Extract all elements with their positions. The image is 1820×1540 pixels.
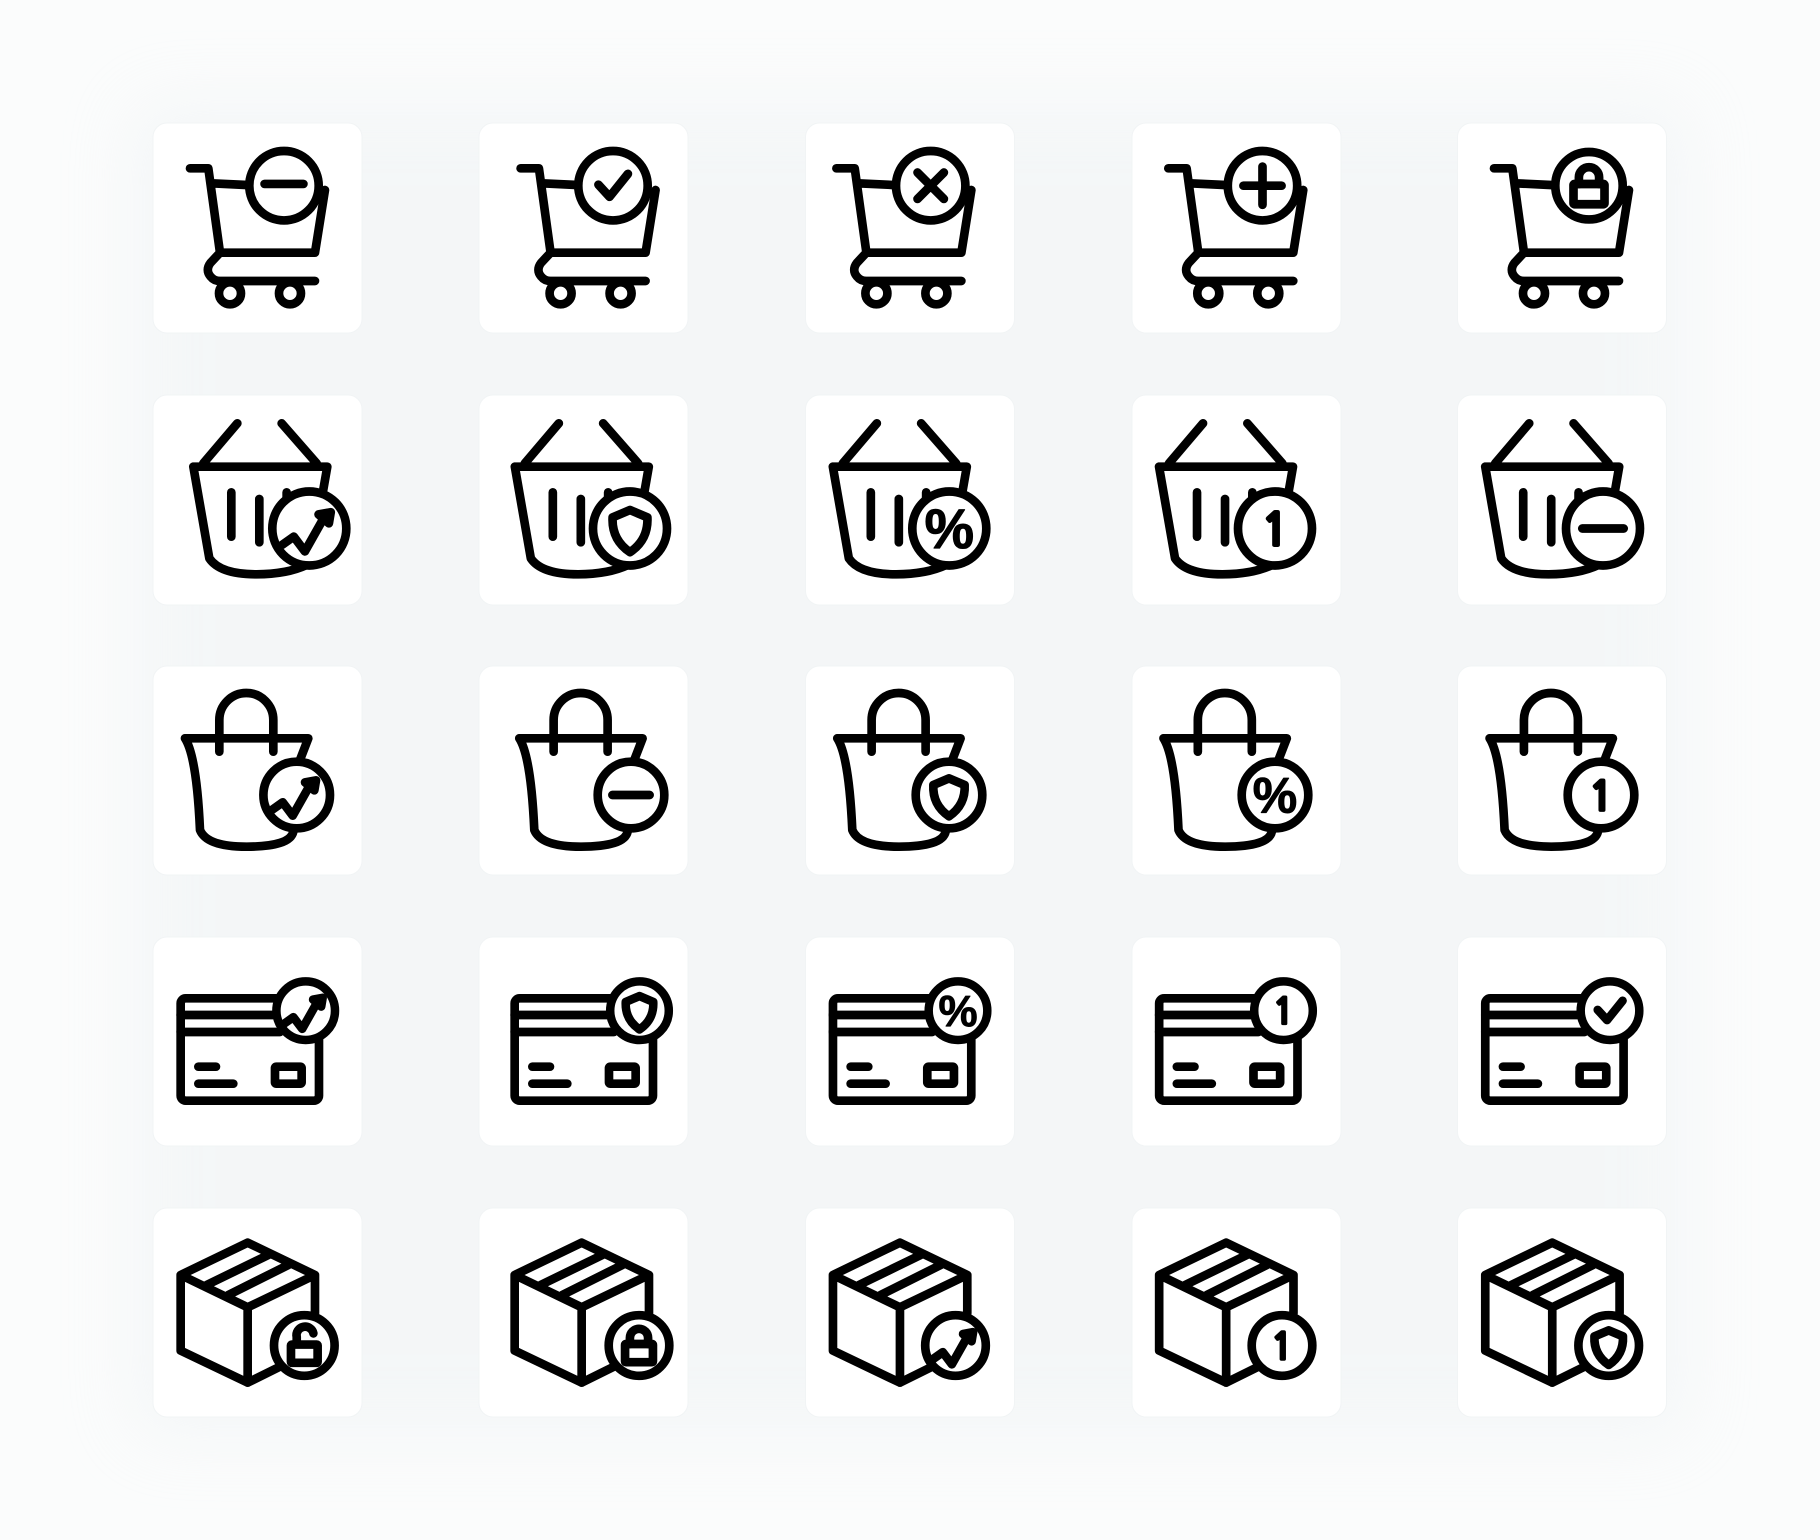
tile (479, 1208, 688, 1417)
tile (153, 1208, 362, 1417)
icon: cart (521, 168, 656, 304)
tile (1132, 395, 1341, 605)
panel: bag one (1458, 666, 1666, 875)
icon: bag (837, 693, 961, 847)
icon: basket (833, 423, 967, 574)
tile (806, 937, 1014, 1146)
icon: box (181, 1243, 315, 1383)
icon: bag (1163, 693, 1287, 847)
icon: trend badge (925, 1315, 986, 1376)
icon: number badge: 1 (1271, 1328, 1293, 1365)
panel: box one (1132, 1208, 1341, 1417)
tile (1132, 123, 1341, 333)
panel: credit card shield (479, 937, 688, 1146)
icon: percent badge (1242, 762, 1308, 828)
icon: basket (1485, 423, 1619, 574)
icon: number badge: 1 (1261, 508, 1289, 553)
icon: bag (185, 693, 308, 847)
tile (153, 123, 362, 333)
icon: number badge: 1 (1273, 995, 1294, 1030)
tile (1458, 1208, 1666, 1417)
icon: shield badge (610, 981, 669, 1040)
tile (479, 395, 688, 605)
icon: cart (1494, 168, 1629, 304)
panel: box trend (806, 1208, 1014, 1417)
icon: shield badge (593, 492, 667, 566)
icon: number badge (1238, 492, 1312, 566)
panel: box unlocked (153, 1208, 362, 1417)
tile (153, 395, 362, 605)
panel: cart check (479, 123, 688, 333)
panel: basket trend (153, 395, 362, 605)
panel: cart locked (1458, 123, 1666, 333)
icon: minus badge (249, 151, 319, 220)
tile (479, 123, 688, 333)
icon: bag (1490, 693, 1613, 847)
tile (153, 937, 362, 1146)
tile (479, 937, 688, 1146)
tile (1458, 937, 1666, 1146)
panel: bag percent (1132, 666, 1341, 875)
panel: box shield (1458, 1208, 1666, 1417)
tile (153, 666, 362, 875)
panel: credit card percent (806, 937, 1014, 1146)
icon: plus badge (1228, 151, 1297, 220)
panel: basket one (1132, 395, 1341, 605)
icon: shield badge (916, 762, 982, 828)
panel: bag shield (806, 666, 1014, 875)
tile (1458, 666, 1666, 875)
icon: cart (1168, 168, 1303, 304)
icon: open lock badge (274, 1315, 335, 1376)
icon: number badge (1254, 981, 1313, 1040)
soft background glow behind tiles (130, 100, 1690, 1440)
icon: box (1159, 1243, 1293, 1383)
panel: cart add (1132, 123, 1341, 333)
panel: basket percent (806, 395, 1014, 605)
panel: basket shield (479, 395, 688, 605)
panel: credit card check (1458, 937, 1666, 1146)
tile (806, 1208, 1014, 1417)
icon: credit card (515, 998, 653, 1101)
icon: box (833, 1243, 967, 1383)
icon: trend badge (276, 981, 335, 1040)
icon: shield badge (1578, 1315, 1639, 1376)
icon: credit card (833, 998, 971, 1101)
icon: credit card (1485, 998, 1624, 1101)
icon: lock badge (609, 1315, 669, 1376)
icon: basket (515, 423, 649, 574)
panel: basket minus (1458, 395, 1666, 605)
panel: bag minus (479, 666, 688, 875)
tile (1132, 937, 1341, 1146)
icon: number badge: 1 (1589, 777, 1613, 817)
icon: cross badge (896, 151, 965, 220)
tile (1458, 395, 1666, 605)
panel: box locked (479, 1208, 688, 1417)
icon: number badge (1568, 762, 1634, 828)
tile (1458, 123, 1666, 333)
icon: cart (190, 168, 325, 304)
icon: bag (519, 693, 643, 847)
icon: box (515, 1243, 649, 1383)
tile (479, 666, 688, 875)
icon: trend badge (263, 762, 330, 828)
icon: cart (836, 168, 971, 304)
icon: trend badge (272, 492, 346, 566)
icon: number badge (1252, 1315, 1312, 1376)
icon: check badge (578, 151, 648, 220)
tile (806, 666, 1014, 875)
icon: percent badge: % (925, 498, 974, 560)
icon: credit card (1159, 998, 1297, 1101)
icon: credit card (181, 998, 319, 1101)
icon: box (1485, 1243, 1620, 1383)
icon: minus badge (1566, 492, 1640, 566)
icon: basket (193, 423, 327, 574)
icon: percent badge: % (1253, 767, 1297, 823)
panel: bag trend (153, 666, 362, 875)
tile (806, 395, 1014, 605)
panel: credit card trend (153, 937, 362, 1146)
icon: check badge (1581, 981, 1639, 1040)
icon: lock badge (1555, 152, 1623, 219)
tile (1132, 666, 1341, 875)
tile (1132, 1208, 1341, 1417)
icon: percent badge (929, 981, 987, 1040)
panel: credit card one (1132, 937, 1341, 1146)
panel: cart minus (153, 123, 362, 333)
panel: cart remove (806, 123, 1014, 333)
icon: percent badge: % (938, 987, 978, 1036)
tile (806, 123, 1014, 333)
icon: minus badge (598, 762, 664, 828)
icon: percent badge (912, 492, 986, 566)
icon: basket (1159, 423, 1293, 574)
